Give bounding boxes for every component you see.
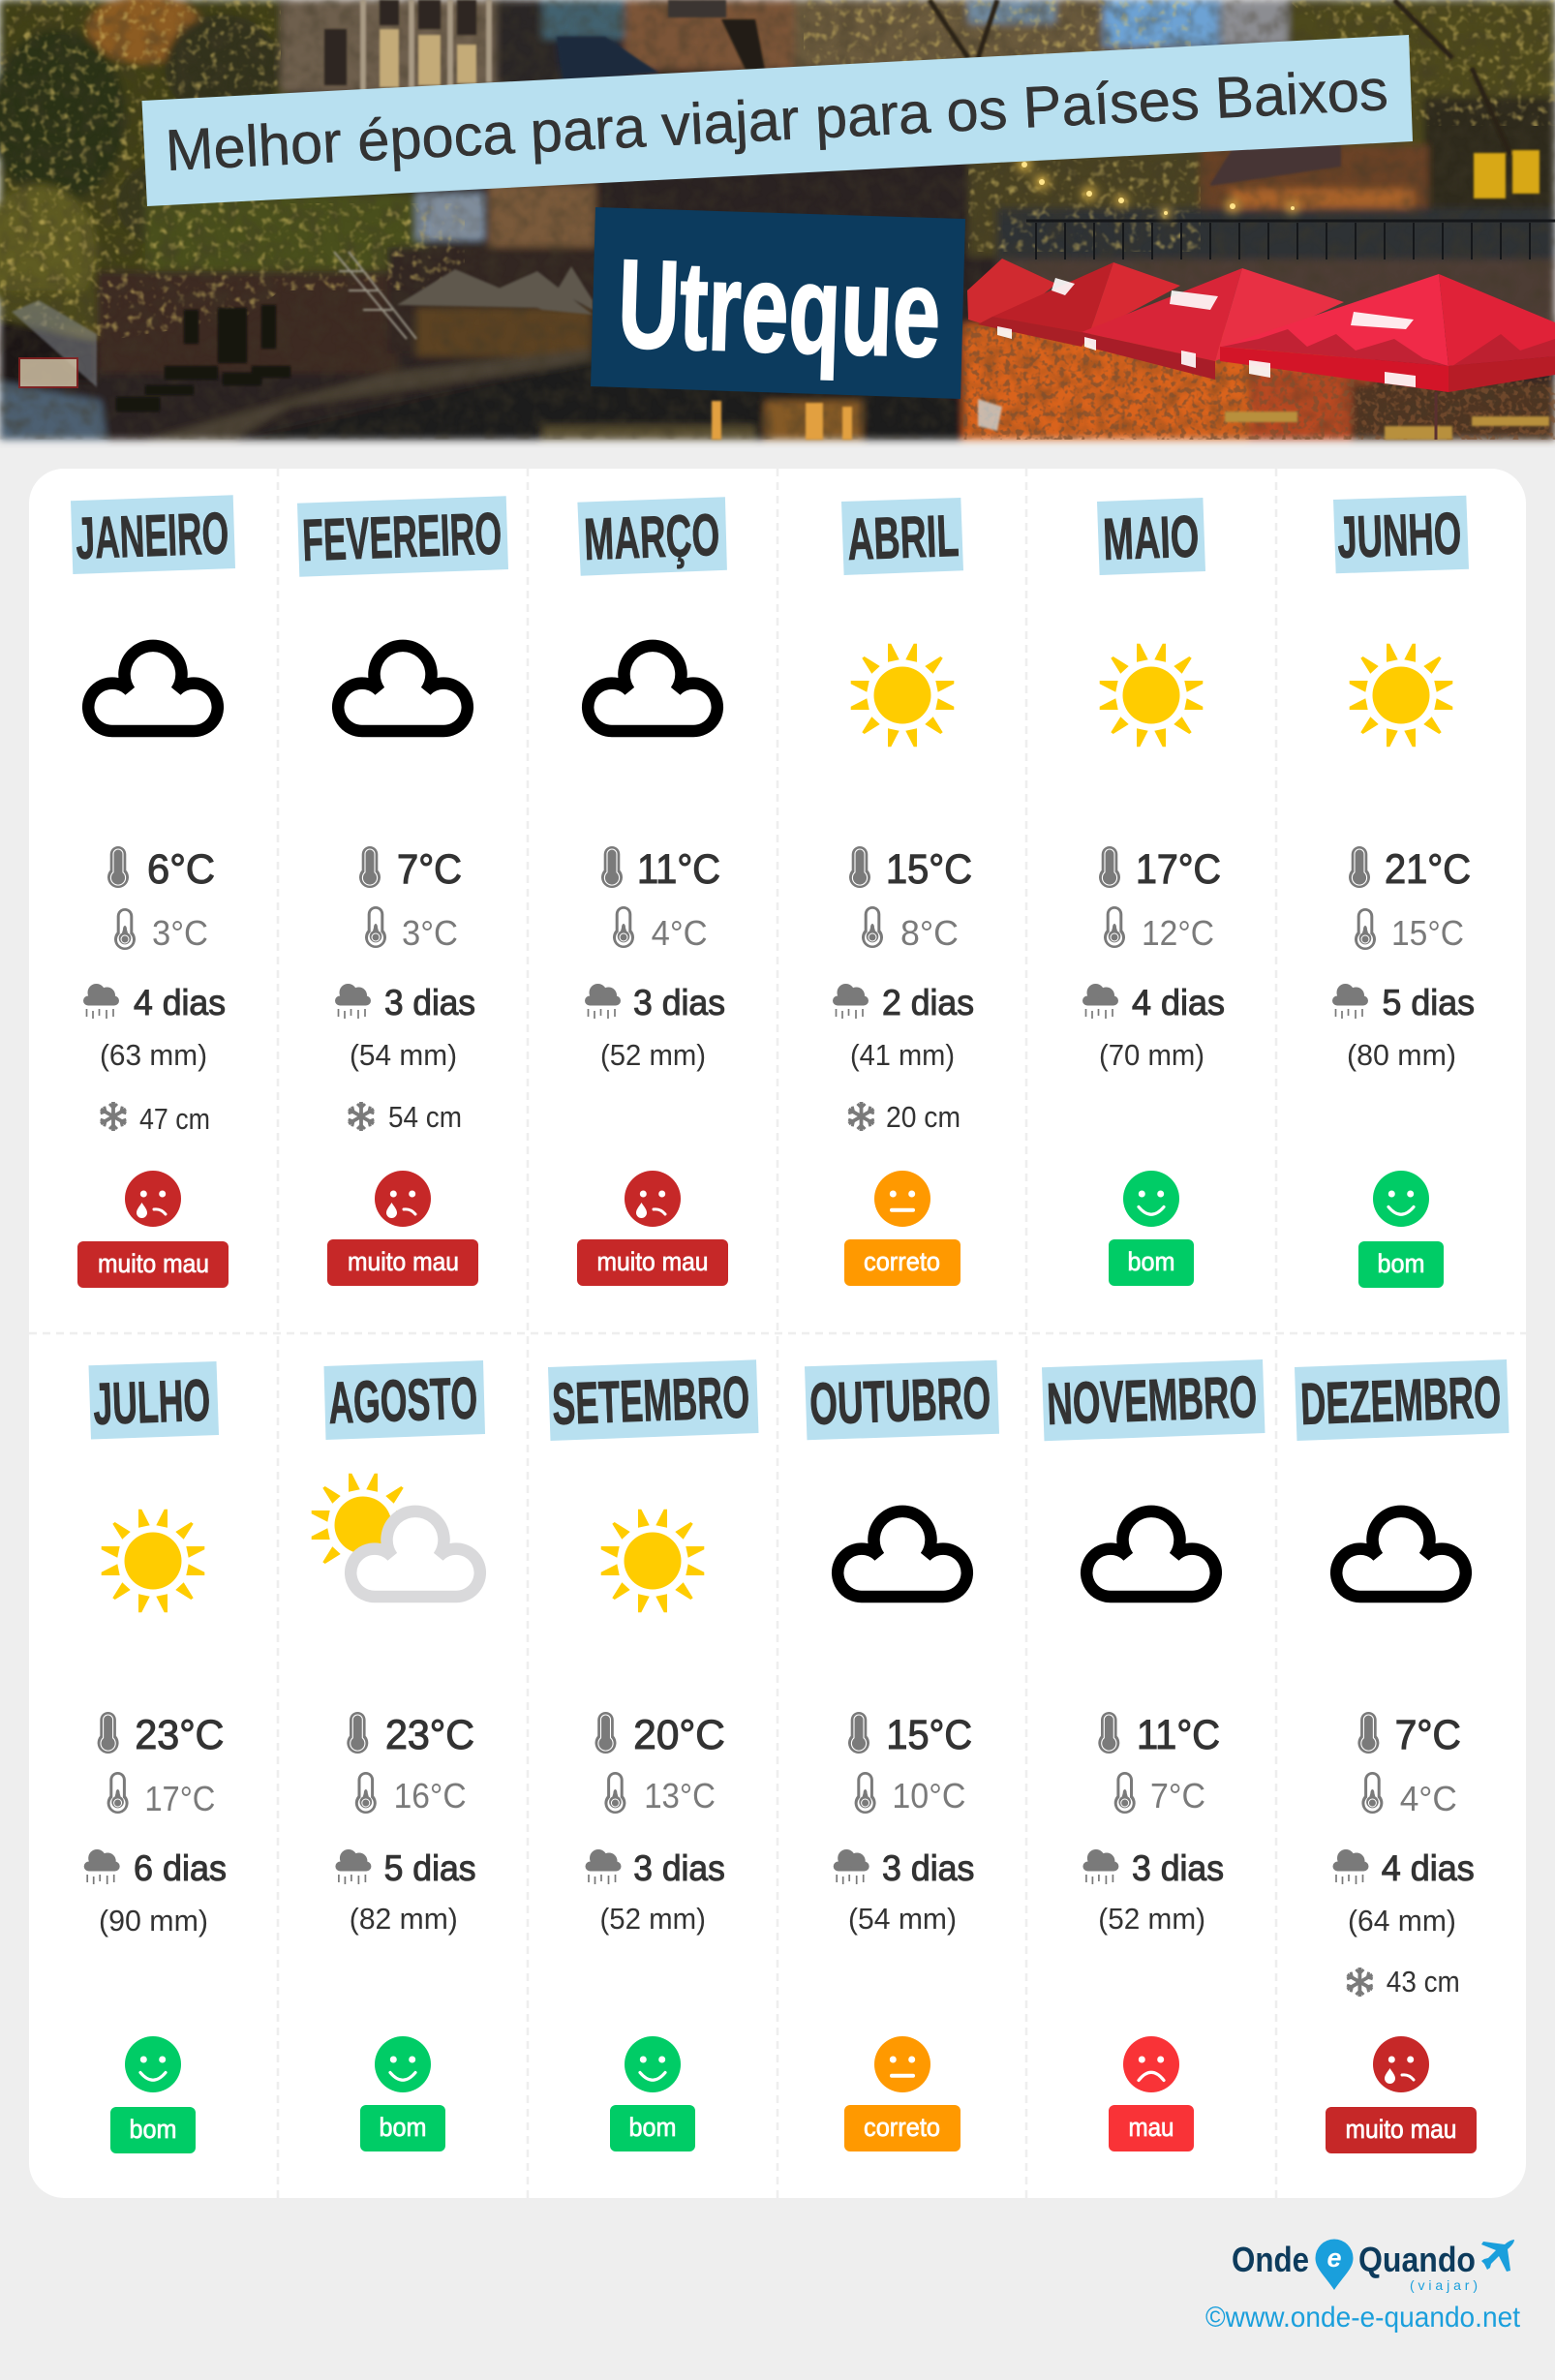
foliage texture bbox=[0, 0, 1555, 338]
icon: sun bbox=[1100, 644, 1203, 747]
min temperature: 16°C bbox=[394, 1776, 467, 1816]
max temperature: 23°C bbox=[135, 1712, 224, 1758]
month label: SETEMBRO bbox=[551, 1364, 750, 1437]
panel: abril bbox=[833, 498, 974, 1286]
panel: novembro bbox=[1042, 1359, 1265, 2151]
rating badge bbox=[1109, 1239, 1194, 1286]
rainfall: (54 mm) bbox=[350, 1038, 457, 1072]
rating face bbox=[1123, 2036, 1179, 2092]
snow: 43 cm bbox=[1387, 1965, 1460, 1999]
rating face bbox=[125, 1171, 181, 1227]
min temperature: 12°C bbox=[1142, 913, 1214, 953]
rain days: 5 dias bbox=[1383, 983, 1475, 1022]
panel: fevereiro bbox=[297, 496, 508, 1286]
snow: 54 cm bbox=[388, 1100, 462, 1134]
rain days: 3 dias bbox=[633, 1848, 725, 1888]
month label bbox=[548, 1359, 759, 1441]
panel: dezembro bbox=[1295, 1359, 1509, 2153]
min temperature bbox=[114, 908, 208, 953]
icon: sun bbox=[601, 1510, 704, 1612]
max temperature: 15°C bbox=[886, 1712, 972, 1758]
month label: OUTUBRO bbox=[808, 1364, 991, 1437]
month label bbox=[89, 1361, 219, 1439]
snow: 20 cm bbox=[886, 1100, 960, 1134]
snow bbox=[349, 1100, 462, 1134]
rating badge: bom bbox=[1127, 1247, 1175, 1276]
rating badge: mau bbox=[1129, 2113, 1174, 2142]
rating badge bbox=[77, 1241, 229, 1288]
rating badge bbox=[1326, 2107, 1477, 2153]
min temperature bbox=[855, 1772, 965, 1816]
rating face bbox=[375, 1171, 431, 1227]
main white panel bbox=[29, 469, 1526, 2198]
rating badge bbox=[360, 2105, 445, 2151]
rating badge bbox=[1109, 2105, 1194, 2151]
rainfall: (90 mm) bbox=[99, 1904, 208, 1938]
rainfall: (64 mm) bbox=[1348, 1904, 1456, 1938]
min temperature bbox=[862, 906, 959, 953]
rainfall: (41 mm) bbox=[850, 1038, 955, 1072]
rainfall: (70 mm) bbox=[1099, 1038, 1204, 1072]
rain days: 4 dias bbox=[1132, 983, 1225, 1022]
rating badge: muito mau bbox=[348, 1247, 459, 1276]
month label bbox=[297, 496, 508, 577]
rating badge bbox=[844, 1239, 960, 1286]
icon: location pin: e bbox=[1326, 2243, 1342, 2273]
rain days: 6 dias bbox=[134, 1848, 227, 1888]
min temperature bbox=[1355, 908, 1464, 953]
noise over photo bbox=[0, 0, 1555, 440]
month label: MAIO bbox=[1102, 503, 1200, 572]
rating badge: correto bbox=[864, 2113, 940, 2142]
max temperature bbox=[849, 846, 972, 893]
icon: sun behind cloud bbox=[312, 1474, 480, 1597]
jupiler sign bbox=[19, 358, 77, 387]
rain days bbox=[335, 983, 475, 1022]
rain days: 3 dias bbox=[633, 983, 725, 1022]
max temperature bbox=[98, 1712, 224, 1758]
panel: setembro bbox=[548, 1359, 759, 2151]
rainfall: (82 mm) bbox=[350, 1902, 458, 1936]
rating badge: muito mau bbox=[98, 1249, 209, 1278]
max temperature bbox=[359, 846, 462, 893]
rain days: 3 dias bbox=[384, 983, 475, 1022]
min temperature: 3°C bbox=[152, 913, 208, 953]
panel: maio bbox=[1082, 498, 1225, 1286]
min temperature bbox=[355, 1772, 467, 1816]
logo word: Onde: Onde bbox=[1232, 2240, 1309, 2279]
min temperature bbox=[365, 906, 458, 953]
red umbrellas bbox=[967, 259, 1555, 440]
max temperature bbox=[1357, 1712, 1461, 1758]
rating face bbox=[625, 1171, 681, 1227]
icon: cloud bbox=[338, 646, 468, 731]
rating badge: bom bbox=[629, 2113, 676, 2142]
rain days: 4 dias bbox=[1382, 1848, 1475, 1888]
rain days: 3 dias bbox=[882, 1848, 974, 1888]
month label bbox=[71, 495, 235, 574]
rain days bbox=[84, 1848, 227, 1888]
icon: location pin bbox=[1315, 2239, 1354, 2290]
min temperature: 8°C bbox=[900, 913, 959, 953]
icon: cloud bbox=[1336, 1511, 1466, 1597]
crowd texture bbox=[963, 325, 1555, 440]
city name box bbox=[591, 207, 965, 399]
rain days bbox=[83, 983, 226, 1022]
rain days: 3 dias bbox=[1132, 1848, 1224, 1888]
rating face bbox=[1373, 1171, 1429, 1227]
max temperature: 7°C bbox=[1395, 1712, 1461, 1758]
min temperature: 7°C bbox=[1150, 1776, 1205, 1816]
rainfall: (52 mm) bbox=[600, 1902, 706, 1936]
month label: JANEIRO bbox=[75, 500, 229, 571]
rating badge bbox=[844, 2105, 960, 2151]
min temperature: 15°C bbox=[1391, 913, 1464, 953]
max temperature bbox=[1098, 1712, 1220, 1758]
rating badge bbox=[577, 1239, 728, 1286]
rating face bbox=[375, 2036, 431, 2092]
panel: julho bbox=[84, 1361, 227, 2153]
month label bbox=[1042, 1359, 1265, 1441]
rain days: 2 dias bbox=[882, 983, 974, 1022]
icon: sun bbox=[851, 644, 954, 747]
rainfall: (52 mm) bbox=[1098, 1902, 1205, 1936]
max temperature bbox=[601, 846, 720, 893]
rating face bbox=[625, 2036, 681, 2092]
icon: sun bbox=[102, 1510, 204, 1612]
rating badge: muito mau bbox=[1346, 2115, 1456, 2144]
panel: janeiro bbox=[71, 495, 235, 1288]
max temperature bbox=[1099, 846, 1221, 893]
panel: agosto bbox=[312, 1360, 485, 2151]
rainfall: (52 mm) bbox=[600, 1038, 706, 1072]
month label: JUNHO bbox=[1336, 500, 1462, 570]
rain days bbox=[834, 1848, 974, 1888]
panel: junho bbox=[1332, 496, 1475, 1288]
max temperature bbox=[848, 1712, 972, 1758]
rating badge: bom bbox=[1377, 1249, 1425, 1278]
snow: 47 cm bbox=[139, 1102, 210, 1136]
rating badge: correto bbox=[864, 1247, 940, 1276]
rating face bbox=[874, 2036, 930, 2092]
rating badge: bom bbox=[130, 2115, 176, 2144]
icon: cloud bbox=[588, 646, 717, 731]
title band: Melhor época para viajar para os Países Baixos bbox=[164, 57, 1389, 183]
rating face bbox=[874, 1171, 930, 1227]
rain days bbox=[1332, 983, 1475, 1022]
max temperature bbox=[107, 846, 215, 893]
max temperature bbox=[1349, 846, 1471, 893]
min temperature: 3°C bbox=[402, 913, 458, 953]
icon: cloud bbox=[838, 1511, 967, 1597]
max temperature bbox=[595, 1712, 725, 1758]
rating badge: bom bbox=[380, 2113, 426, 2142]
rating badge bbox=[610, 2105, 695, 2151]
snow bbox=[848, 1100, 960, 1134]
rainfall: (80 mm) bbox=[1347, 1038, 1456, 1072]
rating face bbox=[1373, 2036, 1429, 2092]
fence and street lights bbox=[1017, 157, 1555, 259]
max temperature: 6°C bbox=[147, 846, 215, 893]
month label: AGOSTO bbox=[327, 1364, 478, 1436]
min temperature bbox=[1104, 906, 1214, 953]
rainfall: (54 mm) bbox=[848, 1902, 957, 1936]
month label bbox=[805, 1360, 999, 1440]
min temperature bbox=[1361, 1772, 1457, 1818]
rain days bbox=[1082, 1848, 1224, 1888]
max temperature: 23°C bbox=[385, 1712, 474, 1758]
month label bbox=[841, 498, 963, 575]
max temperature: 20°C bbox=[633, 1712, 725, 1758]
rain days bbox=[833, 983, 974, 1022]
logo: Onde e Quando viajar bbox=[1232, 2239, 1514, 2293]
logo word: viajar: ( v i a j a r ) bbox=[1410, 2277, 1478, 2293]
min temperature: 4°C bbox=[652, 913, 708, 953]
rating face bbox=[1123, 1171, 1179, 1227]
min temperature bbox=[107, 1772, 215, 1818]
panel: março bbox=[577, 497, 728, 1286]
website url: ©www.onde-e-quando.net bbox=[1205, 2302, 1521, 2334]
min temperature: 13°C bbox=[644, 1776, 716, 1816]
rain days: 4 dias bbox=[134, 983, 226, 1022]
logo word: Quando: Quando bbox=[1358, 2240, 1476, 2279]
min temperature: 4°C bbox=[1400, 1779, 1457, 1818]
rating face bbox=[125, 2036, 181, 2092]
rating badge bbox=[327, 1239, 478, 1286]
month label: JULHO bbox=[92, 1367, 211, 1437]
min temperature bbox=[604, 1772, 716, 1816]
snow bbox=[1347, 1965, 1460, 1999]
panel: outubro bbox=[805, 1360, 999, 2151]
rain days bbox=[1332, 1848, 1475, 1888]
rain days bbox=[585, 983, 725, 1022]
min temperature bbox=[1114, 1772, 1205, 1816]
icon: airplane bbox=[1481, 2240, 1514, 2272]
icon: cloud bbox=[1086, 1511, 1216, 1597]
max temperature bbox=[347, 1712, 474, 1758]
rain days bbox=[585, 1848, 725, 1888]
snow bbox=[101, 1102, 210, 1136]
min temperature: 17°C bbox=[144, 1779, 215, 1818]
header photo: Utrecht canal at night bbox=[0, 0, 1555, 440]
icon: sun bbox=[1350, 644, 1452, 747]
rain days: 5 dias bbox=[384, 1848, 476, 1888]
rainfall: (63 mm) bbox=[100, 1038, 207, 1072]
rating badge bbox=[1358, 1241, 1444, 1288]
month label bbox=[1097, 498, 1205, 575]
icon: cloud bbox=[88, 646, 218, 731]
buildings, windows and street details bbox=[12, 0, 1549, 440]
max temperature: 21°C bbox=[1385, 846, 1471, 893]
month label bbox=[577, 497, 727, 576]
rating badge: muito mau bbox=[596, 1247, 709, 1276]
max temperature: 17°C bbox=[1136, 846, 1221, 893]
month label bbox=[1333, 496, 1469, 573]
city name box: Utreque bbox=[616, 232, 943, 383]
min temperature bbox=[613, 906, 708, 953]
max temperature: 11°C bbox=[637, 846, 720, 893]
month label: MARÇO bbox=[583, 502, 720, 572]
max temperature: 7°C bbox=[397, 846, 462, 893]
max temperature: 15°C bbox=[886, 846, 972, 893]
rain days bbox=[1082, 983, 1225, 1022]
rating badge bbox=[110, 2107, 196, 2153]
month label: FEVEREIRO bbox=[301, 500, 503, 573]
month label bbox=[323, 1360, 485, 1440]
month label: ABRIL bbox=[846, 503, 960, 572]
max temperature: 11°C bbox=[1137, 1712, 1220, 1758]
rain days bbox=[335, 1848, 476, 1888]
month label: NOVEMBRO bbox=[1046, 1363, 1258, 1437]
min temperature: 10°C bbox=[892, 1776, 965, 1816]
